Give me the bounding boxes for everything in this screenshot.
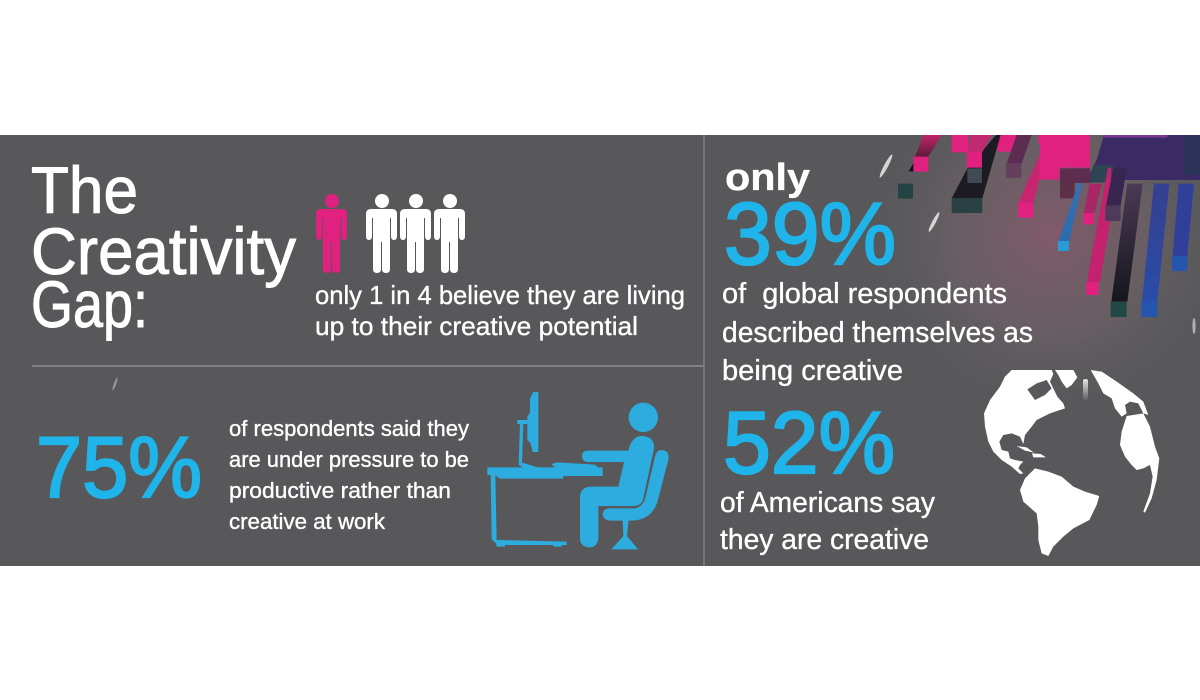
bar: pink diagonal 1 [915,135,942,157]
bar: small pink [1084,184,1102,213]
Africa [1120,413,1159,513]
Greenland [1055,370,1077,388]
pixel bars graphic [898,135,1200,317]
globe streak [1083,379,1088,401]
bar: muted purple [1007,135,1032,163]
icon: globe [984,370,1159,556]
bar: sky blue [1059,183,1083,241]
title: The [31,153,138,227]
text: pressure to be productive [229,416,469,534]
chair back and seat [603,450,669,521]
text: one in four [315,280,685,341]
bar: blue long [1142,184,1169,302]
title: Creativity [31,214,296,288]
bar: long pink [1087,168,1111,282]
stat: 52%: 52% [723,393,895,492]
text: Americans [720,487,935,556]
bar: muted block [1060,168,1090,183]
icon: white person 1 [366,194,397,273]
text: pressure to be productive: are under pressure to be [229,447,469,472]
North America [984,370,1065,474]
bar: purple short [1106,168,1127,206]
text: global respondents: described themselves as [722,317,1033,349]
bar: dark diagonal [952,135,1001,198]
title [31,153,296,341]
monitor arm [517,420,540,468]
text: pressure to be productive: productive rather than [229,478,451,503]
title: Gap: [31,267,148,341]
bar: dark square [898,184,913,199]
icon: pink person [316,194,347,273]
South America [1020,468,1099,556]
bar: blue short [1173,184,1194,256]
icon: person at desk [487,392,669,549]
bar: black long [1111,184,1143,302]
body [580,436,654,547]
bar: pink block [1039,142,1090,180]
text: only: only [725,157,810,199]
text: Americans: they are creative [720,524,929,556]
Caribbean islands [1017,446,1046,457]
icon: white person 3 [434,194,465,273]
monitor [527,392,538,452]
text: global respondents: being creative [722,355,903,387]
icon: white person 2 [400,194,431,273]
background panel [0,135,1200,566]
vertical divider [703,135,705,566]
bar: pink long [1019,155,1039,202]
stat: 75%: 75% [36,420,202,516]
text: one in four: up to their creative potential [315,311,638,341]
horizontal divider [32,365,704,367]
Hudson Bay [1027,380,1052,400]
text: pressure to be productive: creative at work [229,509,386,534]
keyboard [551,462,601,469]
text: Americans: of Americans say [720,487,935,519]
text: global respondents [722,278,1033,387]
stat: 39%: 39% [724,184,896,283]
chair base [611,520,638,549]
bar: dark purple block [1087,135,1200,180]
decorative streaks [111,154,1196,391]
text: one in four: only 1 in 4 believe they are living [315,280,685,310]
icon: four people, one highlighted [316,194,465,273]
head [629,403,658,432]
desk top [487,467,603,479]
background glow [850,135,1200,435]
desk leg [491,475,567,547]
text: global respondents: of global respondents [722,278,1007,310]
Europe [1091,370,1148,417]
text: pressure to be productive: of respondents said they [229,416,469,441]
